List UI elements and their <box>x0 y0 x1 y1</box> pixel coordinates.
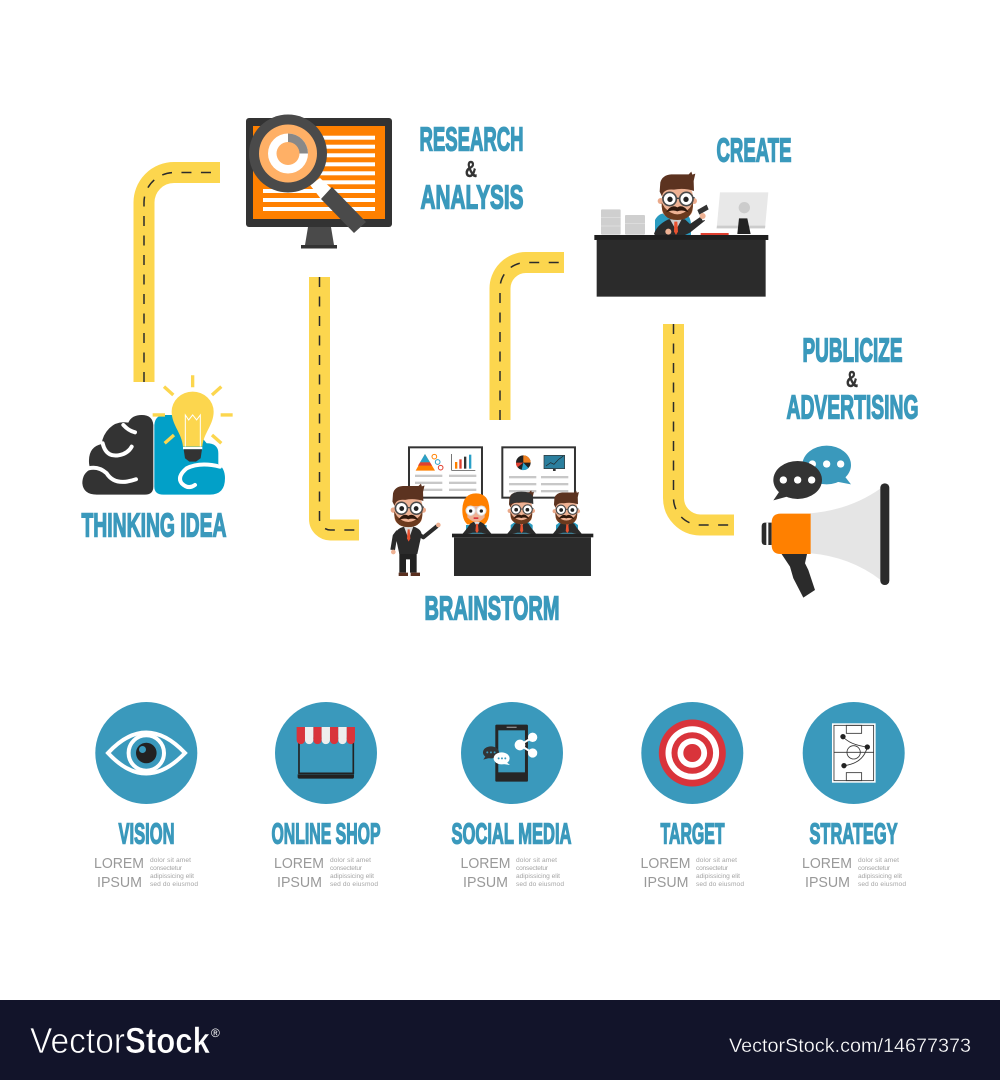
icon: eye <box>95 702 197 804</box>
text: vision lorem: IPSUM <box>97 875 142 891</box>
text: vision lorem <box>94 856 198 891</box>
text: social media lorem: dolor sit amet <box>516 857 557 864</box>
label: vision: VISION <box>118 818 174 850</box>
footer logo: Vector <box>30 1020 125 1061</box>
item: strategy <box>802 702 906 891</box>
item: online shop <box>272 702 380 891</box>
heading: research and analysis <box>420 120 524 215</box>
text: vision lorem: adipissicing elit <box>150 873 194 880</box>
text: social media lorem: sed do eiusmod <box>516 881 564 888</box>
footer bar <box>0 1000 1000 1080</box>
person: man seated middle <box>507 490 536 534</box>
text: social media lorem: consectetur <box>516 865 549 872</box>
text: target lorem: sed do eiusmod <box>696 881 744 888</box>
heading: research and analysis: ANALYSIS <box>420 178 524 215</box>
text: social media lorem: IPSUM <box>463 875 508 891</box>
item: social media <box>452 702 572 891</box>
heading: create: CREATE <box>716 131 792 168</box>
text: strategy lorem: adipissicing elit <box>858 873 902 880</box>
icon: phone with share <box>461 702 563 804</box>
board: right presentation <box>502 447 575 498</box>
icon: tactics board <box>803 702 905 804</box>
text: social media lorem: LOREM <box>460 856 510 872</box>
heading: research and analysis: & <box>465 156 477 182</box>
icon: megaphone with speech bubbles <box>762 446 889 598</box>
icon: monitor with magnifier <box>246 114 392 248</box>
road: thinking to research <box>144 172 220 382</box>
text: strategy lorem: dolor sit amet <box>858 857 899 864</box>
text: social media lorem <box>460 856 564 891</box>
label: strategy: STRATEGY <box>810 818 898 850</box>
text: target lorem <box>640 856 744 891</box>
heading: publicize and advertising: & <box>846 366 858 392</box>
person: man seated right <box>553 491 582 534</box>
illustration: brainstorm meeting <box>391 447 593 576</box>
text: target lorem: LOREM <box>640 856 690 872</box>
text: vision lorem: sed do eiusmod <box>150 881 198 888</box>
text: online shop lorem: consectetur <box>330 865 363 872</box>
footer logo: ® <box>211 1026 220 1040</box>
text: online shop lorem: sed do eiusmod <box>330 881 378 888</box>
text: online shop lorem: LOREM <box>274 856 324 872</box>
text: target lorem: consectetur <box>696 865 729 872</box>
icon: brain and light bulb <box>82 375 233 495</box>
text: strategy lorem: consectetur <box>858 865 891 872</box>
text: online shop lorem: adipissicing elit <box>330 873 374 880</box>
text: online shop lorem: IPSUM <box>277 875 322 891</box>
text: vision lorem: dolor sit amet <box>150 857 191 864</box>
footer url: VectorStock.com/14677373 <box>729 1036 971 1057</box>
label: target: TARGET <box>660 818 725 850</box>
label: social media: SOCIAL MEDIA <box>452 818 572 850</box>
table <box>452 534 593 576</box>
icon: bullseye <box>641 702 743 804</box>
item: vision <box>94 702 198 891</box>
footer logo: Stock <box>125 1020 211 1061</box>
illustration: person at desk <box>594 172 768 297</box>
text: strategy lorem: IPSUM <box>805 875 850 891</box>
text: online shop lorem: dolor sit amet <box>330 857 371 864</box>
board: left presentation <box>409 447 482 498</box>
road: create to publicize <box>674 324 734 525</box>
text: target lorem: adipissicing elit <box>696 873 740 880</box>
text: online shop lorem <box>274 856 378 891</box>
heading: publicize and advertising: PUBLICIZE <box>802 331 902 368</box>
text: strategy lorem: sed do eiusmod <box>858 881 906 888</box>
footer logo <box>30 1020 220 1061</box>
road: brainstorm to create <box>500 262 564 420</box>
icon: storefront laptop <box>275 702 377 804</box>
text: vision lorem: LOREM <box>94 856 144 872</box>
text: target lorem: dolor sit amet <box>696 857 737 864</box>
person: woman seated <box>462 493 492 534</box>
text: social media lorem: adipissicing elit <box>516 873 560 880</box>
item: target <box>640 702 744 891</box>
heading: brainstorm: BRAINSTORM <box>424 589 560 626</box>
heading: publicize and advertising <box>786 331 918 425</box>
text: vision lorem: consectetur <box>150 865 183 872</box>
text: target lorem: IPSUM <box>644 875 688 891</box>
heading: research and analysis: RESEARCH <box>420 120 524 157</box>
person: presenter <box>391 484 441 576</box>
label: online shop: ONLINE SHOP <box>272 818 380 850</box>
road: research to brainstorm <box>320 277 359 530</box>
text: strategy lorem: LOREM <box>802 856 852 872</box>
heading: thinking idea: THINKING IDEA <box>82 506 226 543</box>
text: strategy lorem <box>802 856 906 891</box>
